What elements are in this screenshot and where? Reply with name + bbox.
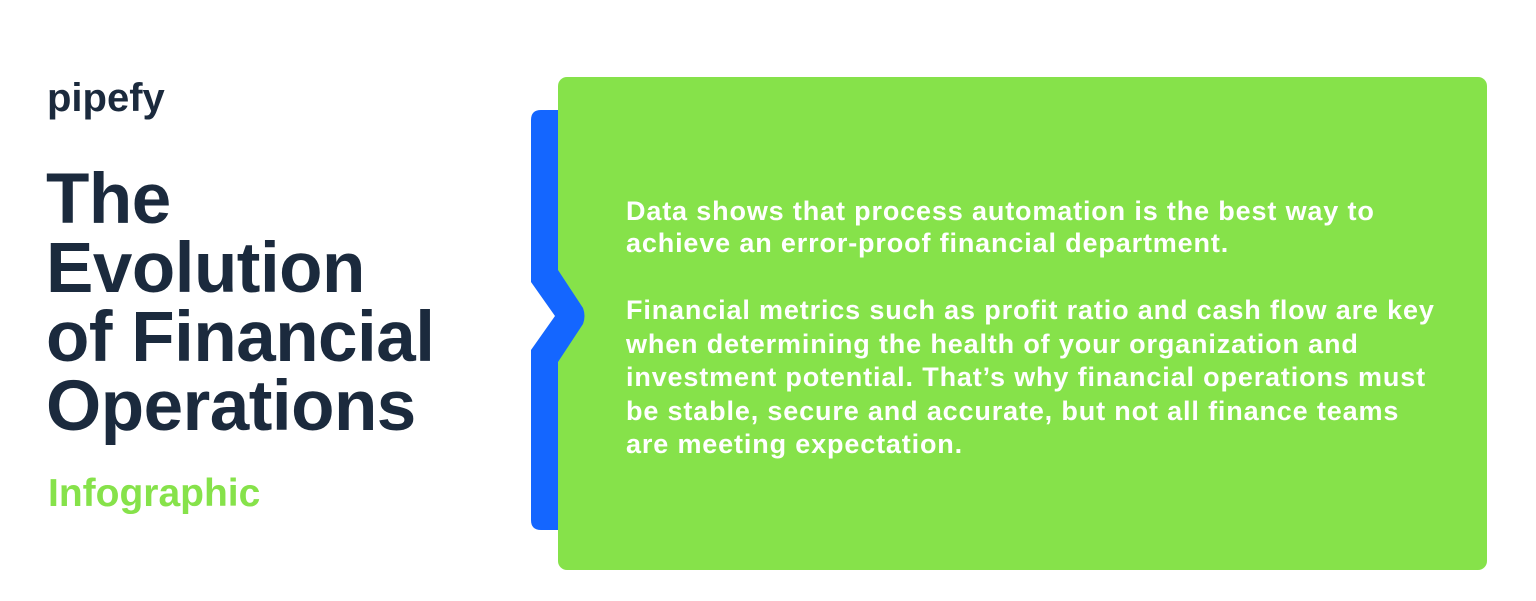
text block: explanation paragraph: are meeting expectation. <box>626 429 963 459</box>
text block: explanation paragraph: Financial metrics such as profit ratio and cash flow are key <box>626 295 1435 325</box>
title: The <box>46 160 171 239</box>
blue bracket <box>531 110 565 530</box>
text block: intro statement: Data shows that process automation is the best way to <box>626 196 1375 226</box>
text block: explanation paragraph: be stable, secure and accurate, but not all finance teams <box>626 396 1399 426</box>
subtitle: Infographic: Infographic <box>48 472 260 515</box>
text block: explanation paragraph: when determining the health of your organization and <box>626 328 1359 358</box>
text block: explanation paragraph: investment potential. That’s why financial operations must <box>626 362 1426 392</box>
text block: intro statement: achieve an error-proof financial department. <box>626 228 1229 258</box>
title: of Financial <box>46 298 434 377</box>
text block: explanation paragraph <box>626 295 1435 459</box>
title <box>46 160 434 446</box>
title: Operations <box>46 367 416 446</box>
green panel <box>558 77 1487 570</box>
logo: pipefy: pipefy <box>47 76 165 120</box>
title: Evolution <box>46 229 365 308</box>
text block: intro statement <box>626 196 1375 258</box>
